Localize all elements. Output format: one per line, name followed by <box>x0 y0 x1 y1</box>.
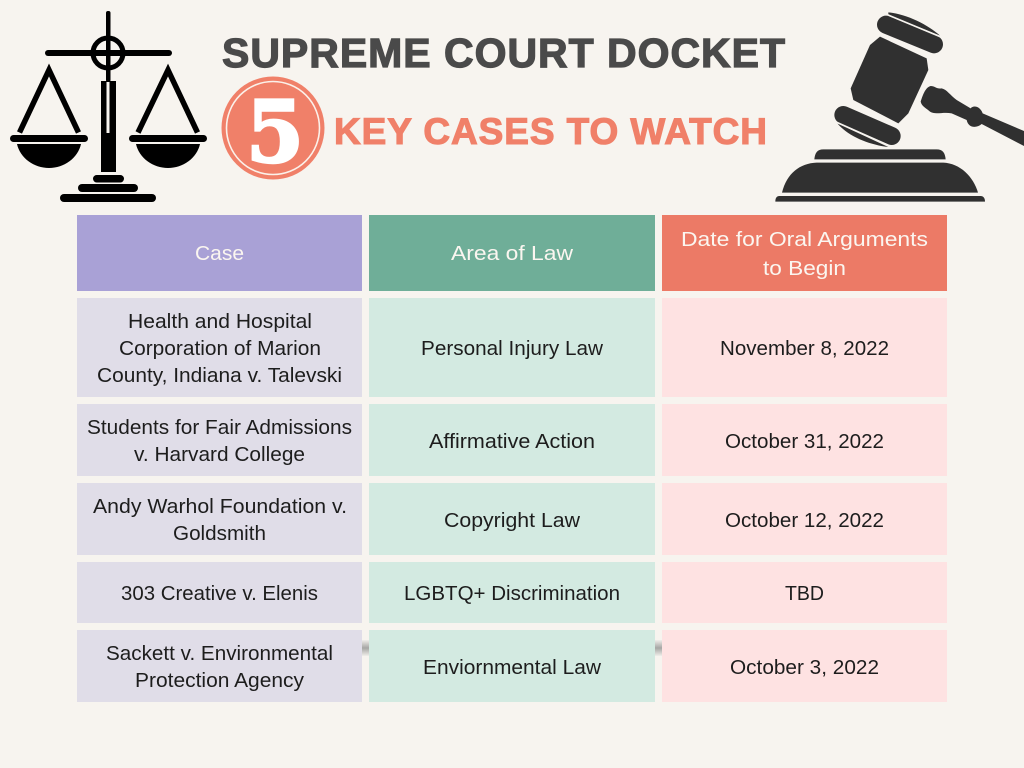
row 1: Health and Hospital Corporation: Corporation of Marion <box>119 337 321 360</box>
row 1: Health and Hospital Corporation <box>77 298 947 397</box>
row 3: Andy Warhol Foundation <box>77 483 947 555</box>
row 5: Sackett <box>77 630 947 702</box>
table: five key cases <box>77 215 947 702</box>
header: date for oral arguments: Date for Oral Arguments <box>681 228 928 251</box>
row 3: Andy Warhol Foundation: Goldsmith <box>173 522 266 545</box>
row 1: Health and Hospital Corporation: County, Indiana v. Talevski <box>97 364 342 387</box>
header: area of law: Area of Law <box>451 242 573 265</box>
row 1: Health and Hospital Corporation: November 8, 2022 <box>720 337 889 360</box>
badge: number 5 <box>222 76 324 183</box>
row 4: 303 Creative: 303 Creative v. Elenis <box>121 582 318 605</box>
row 3: Andy Warhol Foundation: Andy Warhol Foundation v. <box>93 495 347 518</box>
icon: scales of justice <box>10 11 207 202</box>
row 4: 303 Creative: LGBTQ+ Discrimination <box>404 582 620 605</box>
badge: number 5: 5 <box>246 83 304 183</box>
icon: gavel and sound block <box>775 12 1024 202</box>
subtitle: key cases to watch: KEY CASES TO WATCH <box>334 111 767 152</box>
row 2: Students for Fair Admissions: Students for Fair Admissions <box>87 416 352 439</box>
row 2: Students for Fair Admissions <box>77 404 947 476</box>
row 3: Andy Warhol Foundation: October 12, 2022 <box>725 509 884 532</box>
row 2: Students for Fair Admissions: v. Harvard College <box>134 443 305 466</box>
row 1: Health and Hospital Corporation: Personal Injury Law <box>421 337 603 360</box>
header: date for oral arguments: to Begin <box>763 257 846 280</box>
header: date for oral arguments <box>662 215 947 291</box>
row 5: Sackett: Enviornmental Law <box>423 656 601 679</box>
row 4: 303 Creative <box>77 562 947 623</box>
row 5: Sackett: Protection Agency <box>135 669 305 692</box>
header: case <box>77 215 362 291</box>
row 2: Students for Fair Admissions: October 31, 2022 <box>725 430 884 453</box>
row 2: Students for Fair Admissions: Affirmative Action <box>429 430 595 453</box>
row 5: Sackett: October 3, 2022 <box>730 656 879 679</box>
title: supreme court docket: SUPREME COURT DOCKET <box>222 30 785 76</box>
row 4: 303 Creative: TBD <box>785 582 824 605</box>
row 1: Health and Hospital Corporation: Health and Hospital <box>128 310 312 333</box>
header: case: Case <box>195 242 244 265</box>
header: area of law <box>369 215 655 291</box>
row 3: Andy Warhol Foundation: Copyright Law <box>444 509 580 532</box>
row 5: Sackett: Sackett v. Environmental <box>106 642 333 665</box>
